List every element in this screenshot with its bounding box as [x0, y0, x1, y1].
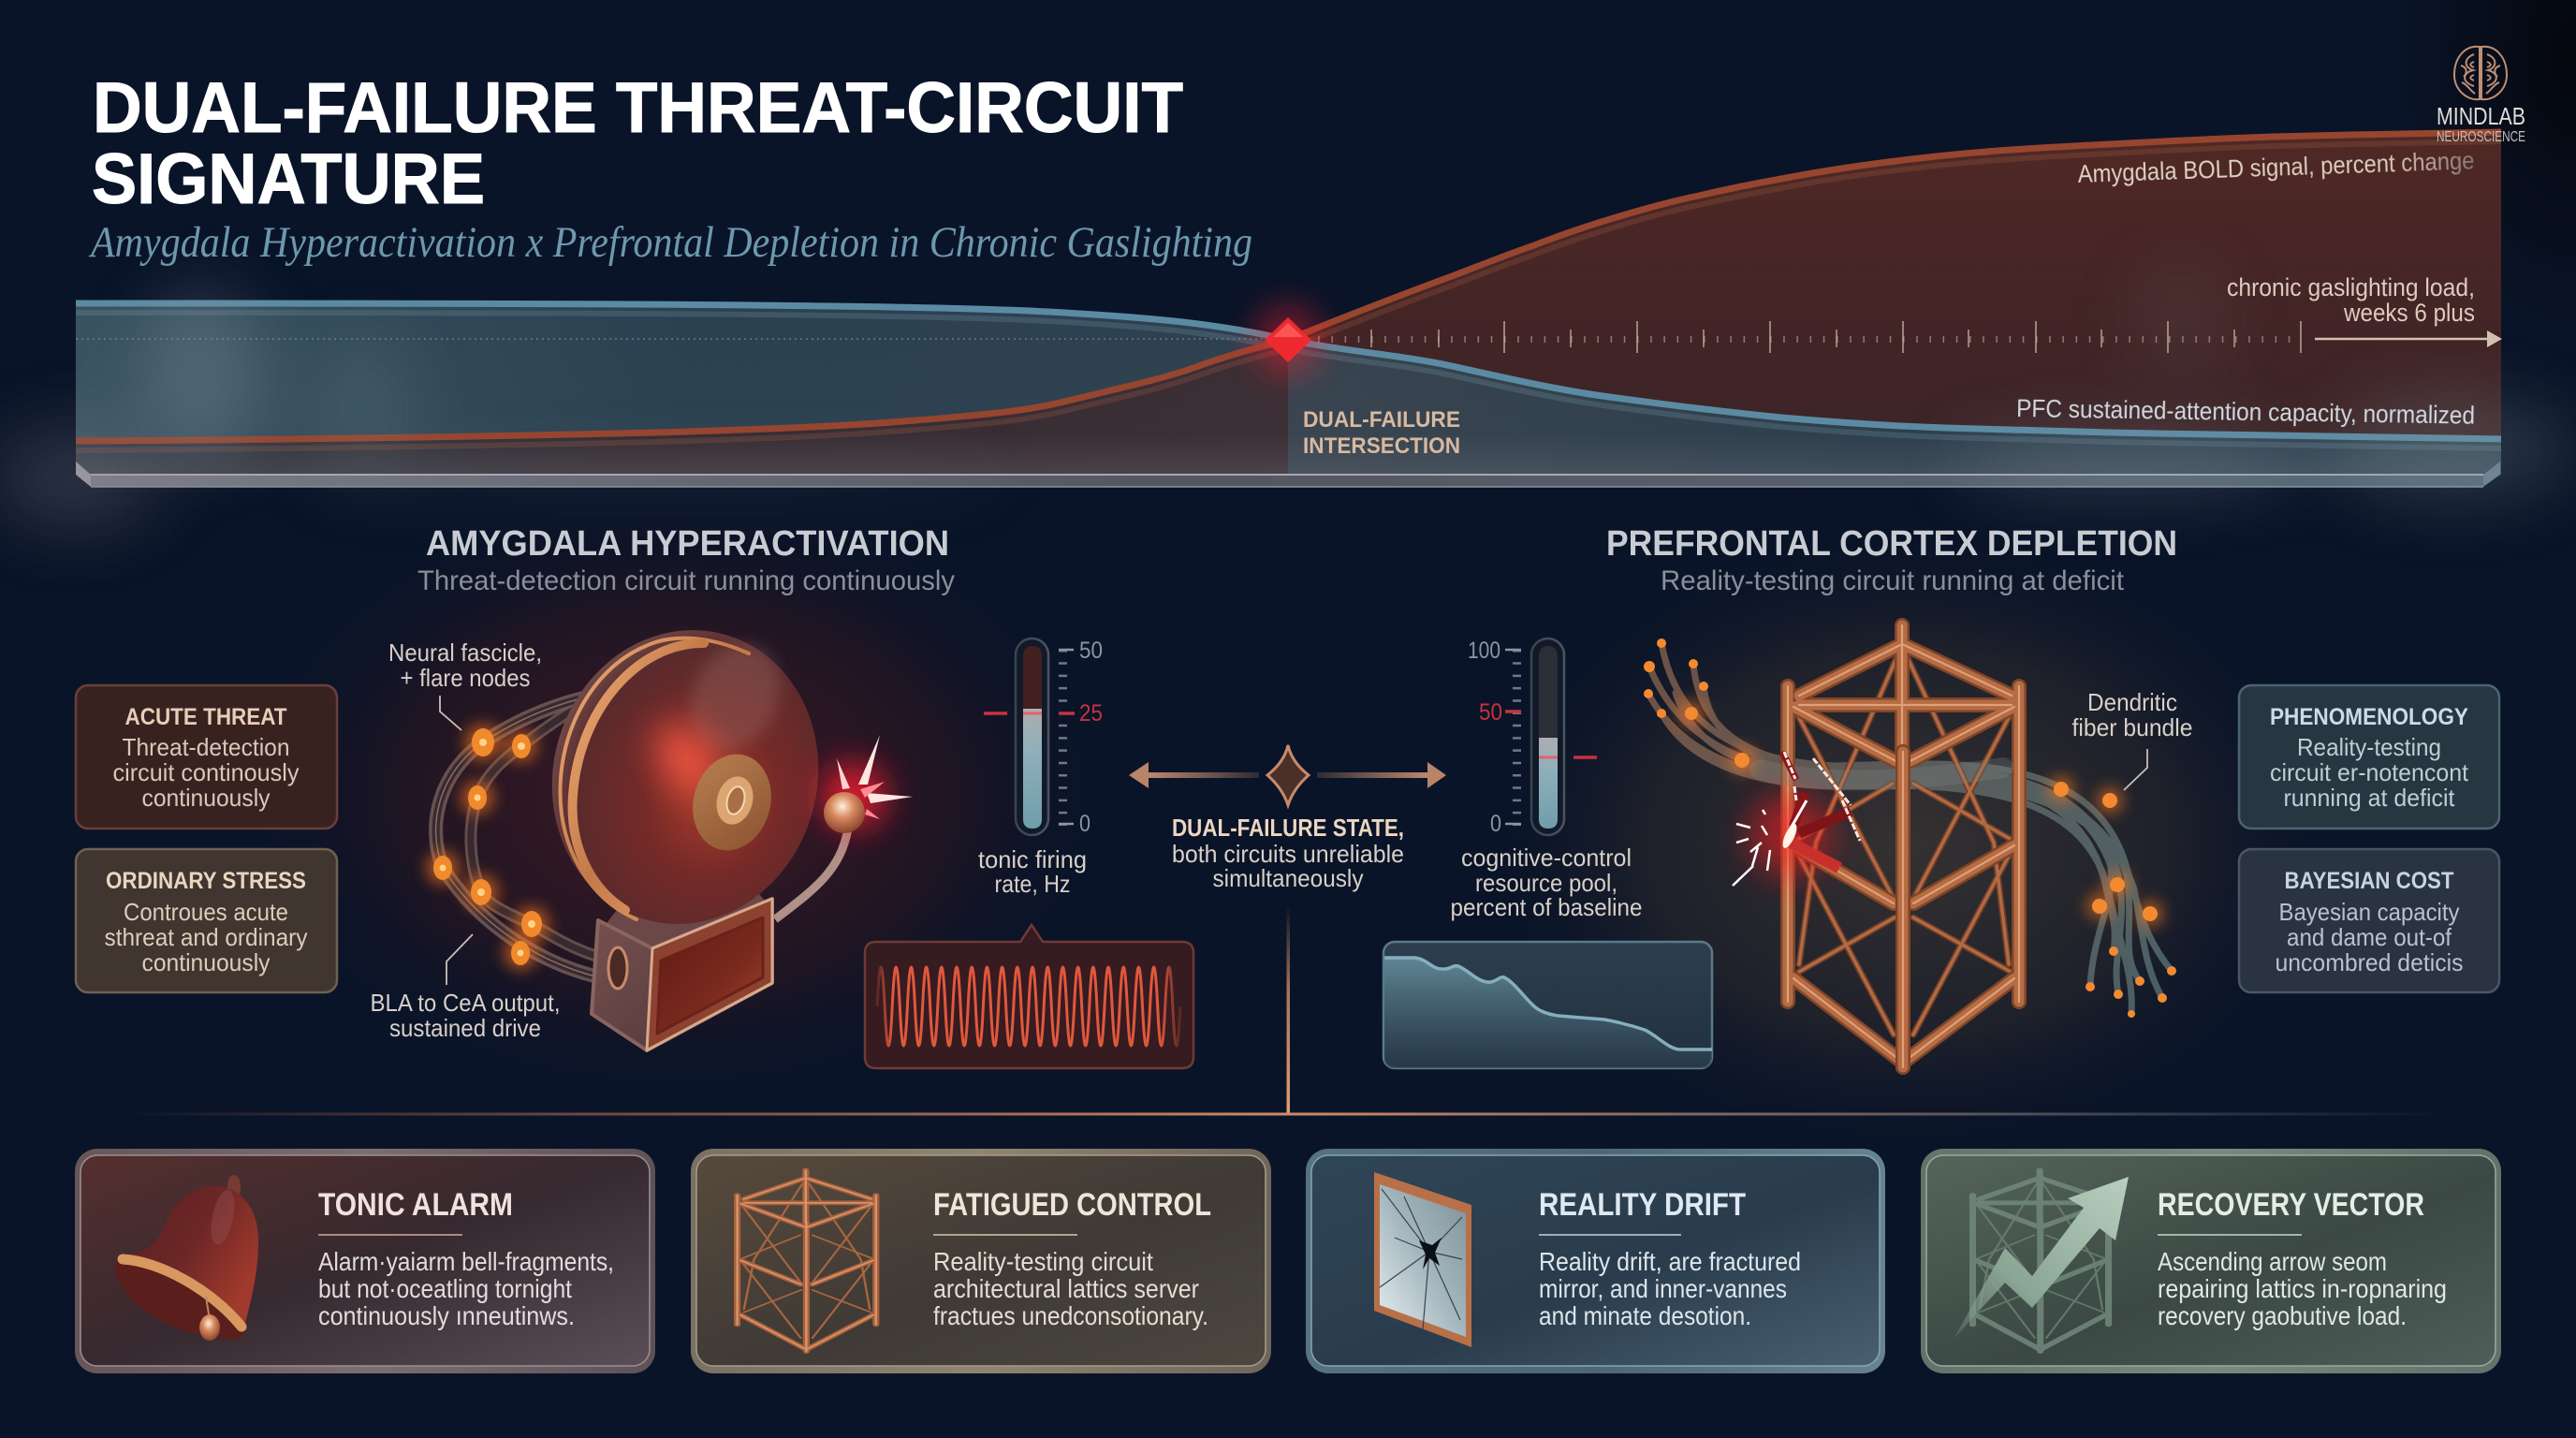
card: reality drift: mirror, and inner-vannes: [1539, 1274, 1787, 1303]
logo: mindlab neuroscience: [2437, 47, 2525, 145]
card: tonic alarm: [75, 1149, 655, 1373]
panel: acute threat: circuit continously: [112, 758, 300, 786]
heading: amygdala: AMYGDALA HYPERACTIVATION: [426, 524, 949, 564]
bell boss: [682, 745, 782, 859]
chart area: low amygdala left: [76, 340, 1288, 475]
intersection diamond marker: [1254, 306, 1322, 374]
gauge caption: cognitive control: resource pool,: [1475, 869, 1617, 897]
dual-failure state text: [1172, 814, 1404, 892]
card: fatigued control: fractues unedconsotionary.: [933, 1301, 1208, 1330]
label: dendritic fiber bundle: Dendritic: [2087, 688, 2177, 716]
glass haze above plate: [76, 340, 2501, 475]
chart area: prefrontal capacity right: [1288, 340, 2501, 475]
dotted baseline: [76, 338, 1264, 340]
fibers passing in front of lattice: [1760, 768, 2003, 781]
lower connector line: [1286, 906, 1290, 1114]
label: BLA to CeA: sustained drive: [389, 1014, 541, 1042]
icon: fatigued lattice: [738, 1170, 876, 1352]
chart: dual-failure curves: [0, 132, 2574, 529]
heading: amygdala: [417, 524, 955, 596]
panel: ordinary stress: continuously: [142, 948, 270, 976]
axis label: chronic gaslighting load,: [2227, 273, 2475, 301]
panel: bayesian cost: Bayesian capacity: [2278, 898, 2460, 926]
icon: repairing lattice: [1973, 1170, 2109, 1352]
bell copper rim: [560, 638, 749, 919]
front lattice post: [1895, 752, 1910, 1067]
card: recovery vector: recovery gaobutive load.: [2158, 1301, 2407, 1330]
label: BLA to CeA: BLA to CeA output,: [371, 989, 560, 1017]
bell dome: [520, 600, 851, 954]
panel: bayesian cost: and dame out-of: [2287, 923, 2452, 951]
panel: bayesian cost: uncombred deticis: [2275, 948, 2464, 976]
panel: ordinary stress: ORDINARY STRESS: [106, 868, 306, 894]
intersection label: INTERSECTION: [1303, 433, 1460, 459]
bell base neck: [604, 871, 769, 957]
card: reality drift: Reality drift, are fractured: [1539, 1247, 1801, 1276]
glass base plate: [76, 462, 2500, 487]
section divider: [122, 1112, 2452, 1116]
waveform panel: tonic firing: [865, 925, 1193, 1068]
card: recovery vector: repairing lattics in-ropnaring: [2158, 1274, 2447, 1303]
subtitle: Amygdala Hyperactivation x Prefrontal Depletion in Chronic Gaslighting: [88, 218, 1252, 267]
heading: prefrontal: PREFRONTAL CORTEX DEPLETION: [1606, 524, 2177, 564]
panel: acute threat: ACUTE THREAT: [125, 704, 286, 730]
title: DUAL-FAILURE THREAT-CIRCUIT: [93, 68, 1183, 148]
time axis ticks: [1305, 321, 2301, 353]
gauge: cognitive control pool: 100: [1468, 638, 1500, 664]
icon: fractured mirror: [1374, 1172, 1471, 1347]
bell inner glow: [644, 712, 728, 805]
bell ambient glow: [234, 487, 1114, 1105]
lattice fracture flare: [1733, 752, 1860, 886]
dendritic fibers: [1648, 643, 2172, 1014]
card: tonic alarm: continuously ınneutinws.: [318, 1301, 575, 1330]
PFC curve: [76, 303, 2501, 448]
gauge: cognitive control pool: 50: [1479, 699, 1502, 726]
dual-failure state text: simultaneously: [1213, 864, 1363, 892]
icon: recovery arrow: [1954, 1177, 2129, 1339]
dual-failure state text: DUAL-FAILURE STATE,: [1172, 814, 1404, 842]
fiber nodes: [1644, 638, 2176, 1018]
axis label: [2227, 273, 2475, 327]
dual-failure state text: both circuits unreliable: [1172, 840, 1404, 868]
icon: tonic bell: [115, 1175, 258, 1341]
gauge: tonic firing rate: 50: [1079, 638, 1103, 664]
chart area: amygdala signal right: [1288, 132, 2501, 475]
flare nodes: [426, 724, 549, 970]
gauge caption: tonic firing: [978, 845, 1087, 898]
heading: prefrontal: Reality-testing circuit running at deficit: [1661, 565, 2125, 596]
icon: brain: [2454, 47, 2507, 99]
gauge: cognitive control pool: [1468, 638, 1597, 837]
bell fascicle: [436, 697, 621, 981]
bell dome highlight: [673, 629, 797, 766]
card: recovery vector: RECOVERY VECTOR: [2158, 1187, 2424, 1223]
panel: ordinary stress: sthreat and ordinary: [105, 923, 307, 951]
axis label: weeks 6 plus: [2343, 299, 2475, 327]
logo: mindlab neuroscience: NEUROSCIENCE: [2437, 129, 2525, 145]
card: reality drift: [1306, 1149, 1885, 1373]
panel: bayesian cost: BAYESIAN COST: [2284, 868, 2454, 894]
intersection connector line: [1286, 356, 1290, 749]
panel: ordinary stress: Controues acute: [124, 898, 288, 926]
amygdala curve: [76, 132, 2501, 450]
panel: phenomenology: PHENOMENOLOGY: [2270, 704, 2468, 730]
top right vignette: [2398, 0, 2576, 337]
panel: phenomenology: circuit er-notencont: [2270, 758, 2469, 786]
card: tonic alarm: Alarm·yaiarm bell-fragments,: [318, 1247, 614, 1276]
label: dendritic fiber bundle: fiber bundle: [2072, 713, 2192, 741]
amygdala curve label: Amygdala BOLD signal, percent change: [2077, 146, 2475, 188]
bell clapper arm: [775, 829, 848, 919]
card: reality drift: REALITY DRIFT: [1539, 1187, 1746, 1223]
icon: alarm bell: [426, 600, 913, 1050]
center state marker with arrows: [1129, 745, 1446, 805]
heading: prefrontal: [1606, 524, 2177, 596]
panel: acute threat: Threat-detection: [122, 733, 290, 761]
label: neural fascicle: + flare nodes: [401, 664, 530, 692]
gauge caption: cognitive control: cognitive-control: [1461, 844, 1632, 872]
gauge: cognitive control pool: 0: [1490, 811, 1501, 837]
gauge caption: cognitive control: percent of baseline: [1451, 893, 1642, 921]
gauge: tonic firing rate: 25: [1079, 700, 1103, 726]
panel: phenomenology: [2239, 685, 2499, 829]
card: reality drift: and minate desotion.: [1539, 1301, 1751, 1330]
panel: acute threat: [76, 685, 337, 829]
card: fatigued control: FATIGUED CONTROL: [933, 1187, 1211, 1223]
card: recovery vector: [1921, 1149, 2501, 1373]
card: recovery vector: Ascending arrow seom: [2158, 1247, 2387, 1276]
logo: mindlab neuroscience: MINDLAB: [2437, 102, 2525, 130]
panel: phenomenology: running at deficit: [2284, 784, 2455, 812]
PFC curve label: PFC sustained-attention capacity, normalized: [2016, 394, 2475, 430]
card: fatigued control: Reality-testing circuit: [933, 1247, 1153, 1276]
card: tonic alarm: TONIC ALARM: [318, 1187, 513, 1223]
label: neural fascicle: Neural fascicle,: [388, 638, 542, 667]
label: dendritic fiber bundle: [2072, 688, 2192, 790]
bell base box: [592, 899, 772, 1050]
icon: fractured lattice with fibers: [1644, 625, 2176, 1067]
chart area: teal capacity left: [76, 303, 1288, 475]
title: [92, 68, 1183, 219]
fog wisps: [0, 262, 2574, 529]
gauge caption: cognitive control: [1451, 844, 1642, 921]
gauge caption: tonic firing: tonic firing: [978, 845, 1087, 873]
gauge: tonic firing rate: [984, 638, 1103, 837]
lattice ambient glow: [1479, 524, 2340, 1161]
label: neural fascicle: [388, 638, 542, 730]
title: SIGNATURE: [92, 139, 485, 219]
gauge caption: tonic firing: rate, Hz: [994, 870, 1071, 898]
decline chart panel: [1383, 942, 1712, 1068]
lattice copper frame: [1788, 625, 2019, 1067]
card: tonic alarm: but not·oceatling tornight: [318, 1274, 572, 1303]
panel: acute threat: continuously: [142, 784, 270, 812]
panel: ordinary stress: [76, 849, 337, 992]
card: fatigued control: [691, 1149, 1271, 1373]
heading: amygdala: Threat-detection circuit running continuously: [417, 565, 955, 596]
intersection label: DUAL-FAILURE: [1303, 407, 1460, 433]
time axis arrow: [2315, 330, 2502, 347]
intersection label: [1303, 407, 1460, 459]
label: BLA to CeA: [371, 934, 560, 1042]
panel: bayesian cost: [2239, 849, 2499, 992]
panel: phenomenology: Reality-testing: [2297, 733, 2441, 761]
gauge: tonic firing rate: 0: [1079, 811, 1090, 837]
card: fatigued control: architectural lattics server: [933, 1274, 1199, 1303]
clapper flare: [822, 735, 913, 833]
